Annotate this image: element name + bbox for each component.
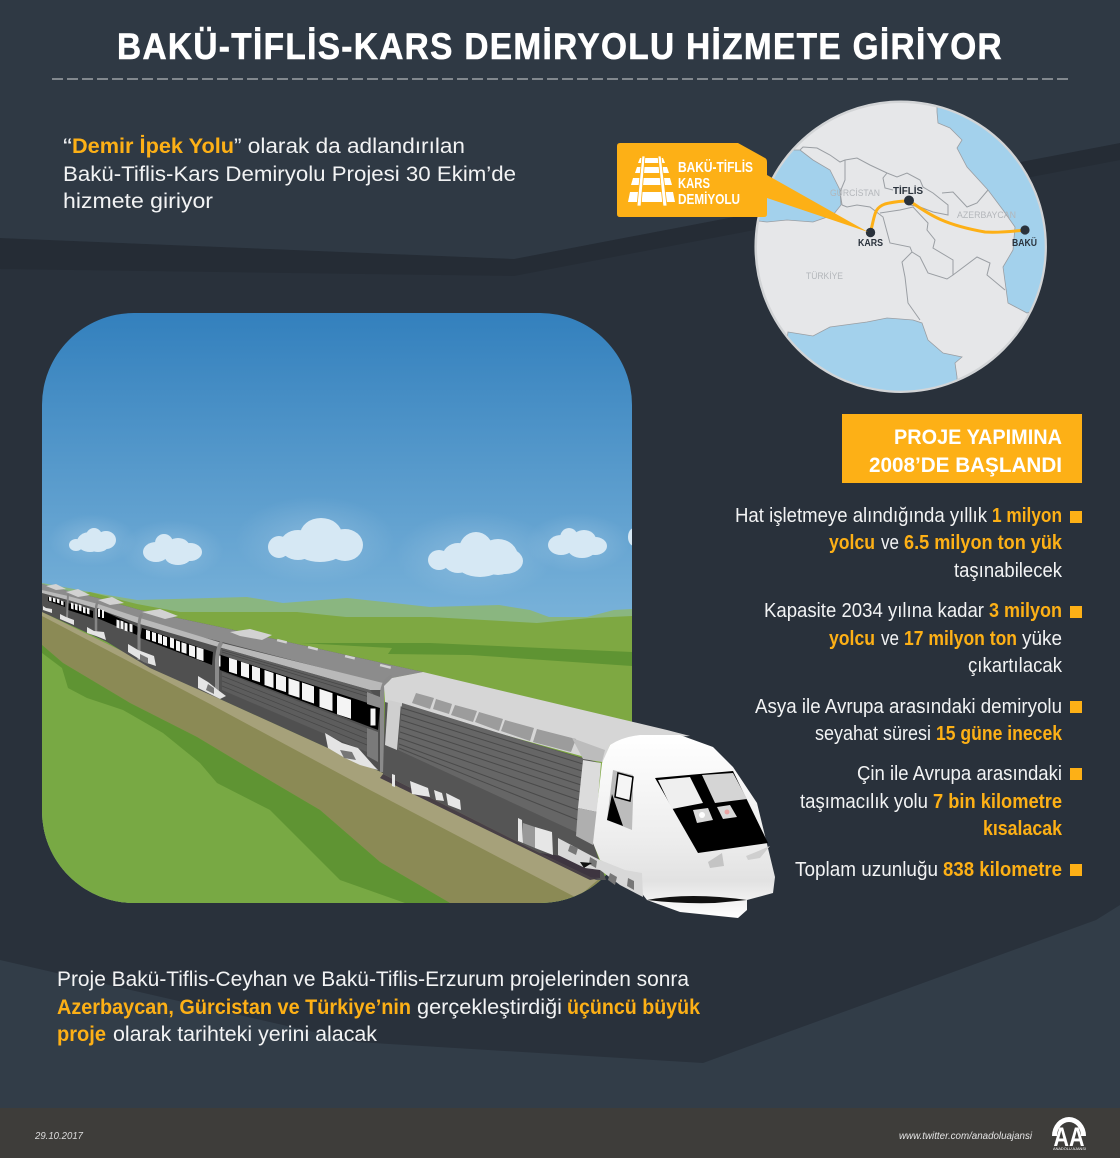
fact: capacity at opening: 1 milyon	[992, 505, 1062, 527]
fact: total length	[795, 859, 1082, 881]
fact: capacity by 2034: Kapasite 2034 yılına kadar	[764, 600, 984, 622]
map of route	[754, 100, 1047, 393]
route line	[871, 201, 1025, 232]
city: Tiflis: TİFLİS	[893, 184, 923, 197]
fact: travel time: 15 güne inecek	[936, 723, 1063, 745]
locomotive	[380, 672, 775, 918]
sea: Mediterranean	[787, 318, 963, 391]
locomotive bogies	[540, 853, 600, 878]
city: Kars	[858, 228, 883, 249]
fact: total length: Toplam uzunluğu	[795, 859, 938, 881]
callout label: BAKÜ-TİFLİS	[678, 159, 753, 176]
fact: route shortening: 7 bin kilometre	[933, 791, 1062, 813]
sea: Black Sea	[750, 150, 841, 222]
train	[42, 584, 775, 918]
clouds	[60, 508, 632, 586]
fact: route shortening	[800, 763, 1082, 840]
fact: capacity at opening: taşınabilecek	[954, 560, 1063, 582]
intro text: Bakü-Tiflis-Kars Demiryolu Projesi 30 Ekim’de	[63, 163, 516, 186]
country labels: TÜRKİYE	[806, 271, 843, 282]
locomotive nose	[593, 735, 775, 918]
closing text	[57, 968, 700, 1046]
hills and fields	[42, 583, 632, 903]
roof domes and vents	[46, 584, 391, 669]
ballast	[42, 612, 600, 898]
callout label: DEMİYOLU	[678, 191, 740, 208]
fact: capacity at opening: ve	[881, 532, 899, 554]
closing text: üçüncü büyük	[567, 996, 700, 1019]
route callout	[617, 143, 868, 232]
sea: Caspian	[936, 107, 1045, 314]
landscape picture panel	[42, 313, 775, 918]
intro text: Demir İpek Yolu	[72, 135, 234, 158]
fact: capacity by 2034: çıkartılacak	[968, 655, 1063, 677]
gangways	[67, 594, 392, 772]
footer bar	[0, 1108, 1120, 1158]
fact: capacity at opening: yolcu	[829, 532, 875, 554]
closing text: olarak tarihteki yerini alacak	[113, 1023, 378, 1046]
fact: total length: 838 kilometre	[943, 859, 1062, 881]
closing text: Azerbaycan, Gürcistan ve Türkiye’nin	[57, 996, 411, 1019]
fact: capacity by 2034: ve	[881, 628, 899, 650]
closing text: gerçekleştirdiği	[417, 996, 562, 1019]
country labels: GÜRCİSTAN	[830, 188, 880, 199]
embankment	[42, 612, 600, 903]
project start box: PROJE YAPIMINA	[894, 426, 1062, 449]
city: Bakü: BAKÜ	[1012, 236, 1037, 249]
carriage bogies	[43, 606, 378, 770]
fact: capacity at opening: Hat işletmeye alındığında yıllık	[735, 505, 988, 527]
train carriages body and roof	[42, 584, 423, 773]
fact: capacity by 2034: yolcu	[829, 628, 875, 650]
icon: Anadolu Agency logo: AA	[1054, 1122, 1084, 1152]
country borders	[800, 147, 1005, 320]
city: Tiflis	[893, 184, 923, 206]
fact: capacity at opening	[735, 505, 1082, 582]
icon: Anadolu Agency logo: ANADOLU AJANSI	[1053, 1147, 1086, 1151]
windows	[49, 597, 376, 726]
window bands	[48, 597, 380, 730]
fact: route shortening: Çin ile Avrupa arasındaki	[857, 763, 1062, 785]
fact: travel time: seyahat süresi	[815, 723, 931, 745]
date: 29.10.2017	[34, 1130, 84, 1142]
closing text: Proje Bakü-Tiflis-Ceyhan ve Bakü-Tiflis-Erzurum projelerinden sonra	[57, 968, 689, 991]
twitter url: www.twitter.com/anadoluajansi	[899, 1130, 1033, 1142]
intro text: hizmete giriyor	[63, 190, 213, 213]
project start box	[842, 414, 1082, 483]
project start box: 2008’DE BAŞLANDI	[869, 454, 1062, 477]
icon: railway track	[628, 156, 675, 206]
fact: capacity at opening: 6.5 milyon ton yük	[904, 532, 1063, 554]
fact: capacity by 2034: 17 milyon ton	[904, 628, 1017, 650]
fact: capacity by 2034: yüke	[1022, 628, 1062, 650]
fact: capacity by 2034	[764, 600, 1082, 677]
callout label	[678, 159, 753, 208]
city: Bakü	[1012, 225, 1037, 249]
fact: travel time	[755, 696, 1082, 745]
fact: capacity by 2034: 3 milyon	[989, 600, 1062, 622]
title: BAKÜ-TİFLİS-KARS DEMİRYOLU HİZMETE GİRİYOR	[117, 26, 1003, 67]
closing text: proje	[57, 1023, 106, 1046]
country labels	[806, 188, 1016, 282]
country labels: AZERBAYCAN	[957, 210, 1016, 221]
intro text: ” olarak da adlandırılan	[234, 135, 465, 158]
fact: route shortening: taşımacılık yolu	[800, 791, 928, 813]
city: Kars: KARS	[858, 238, 883, 249]
roof panels	[412, 693, 576, 752]
fact: travel time: Asya ile Avrupa arasındaki demiryolu	[755, 696, 1062, 718]
callout label: KARS	[678, 175, 710, 192]
fact: route shortening: kısalacak	[983, 818, 1063, 840]
intro text: “	[63, 135, 72, 158]
intro text	[63, 135, 516, 213]
